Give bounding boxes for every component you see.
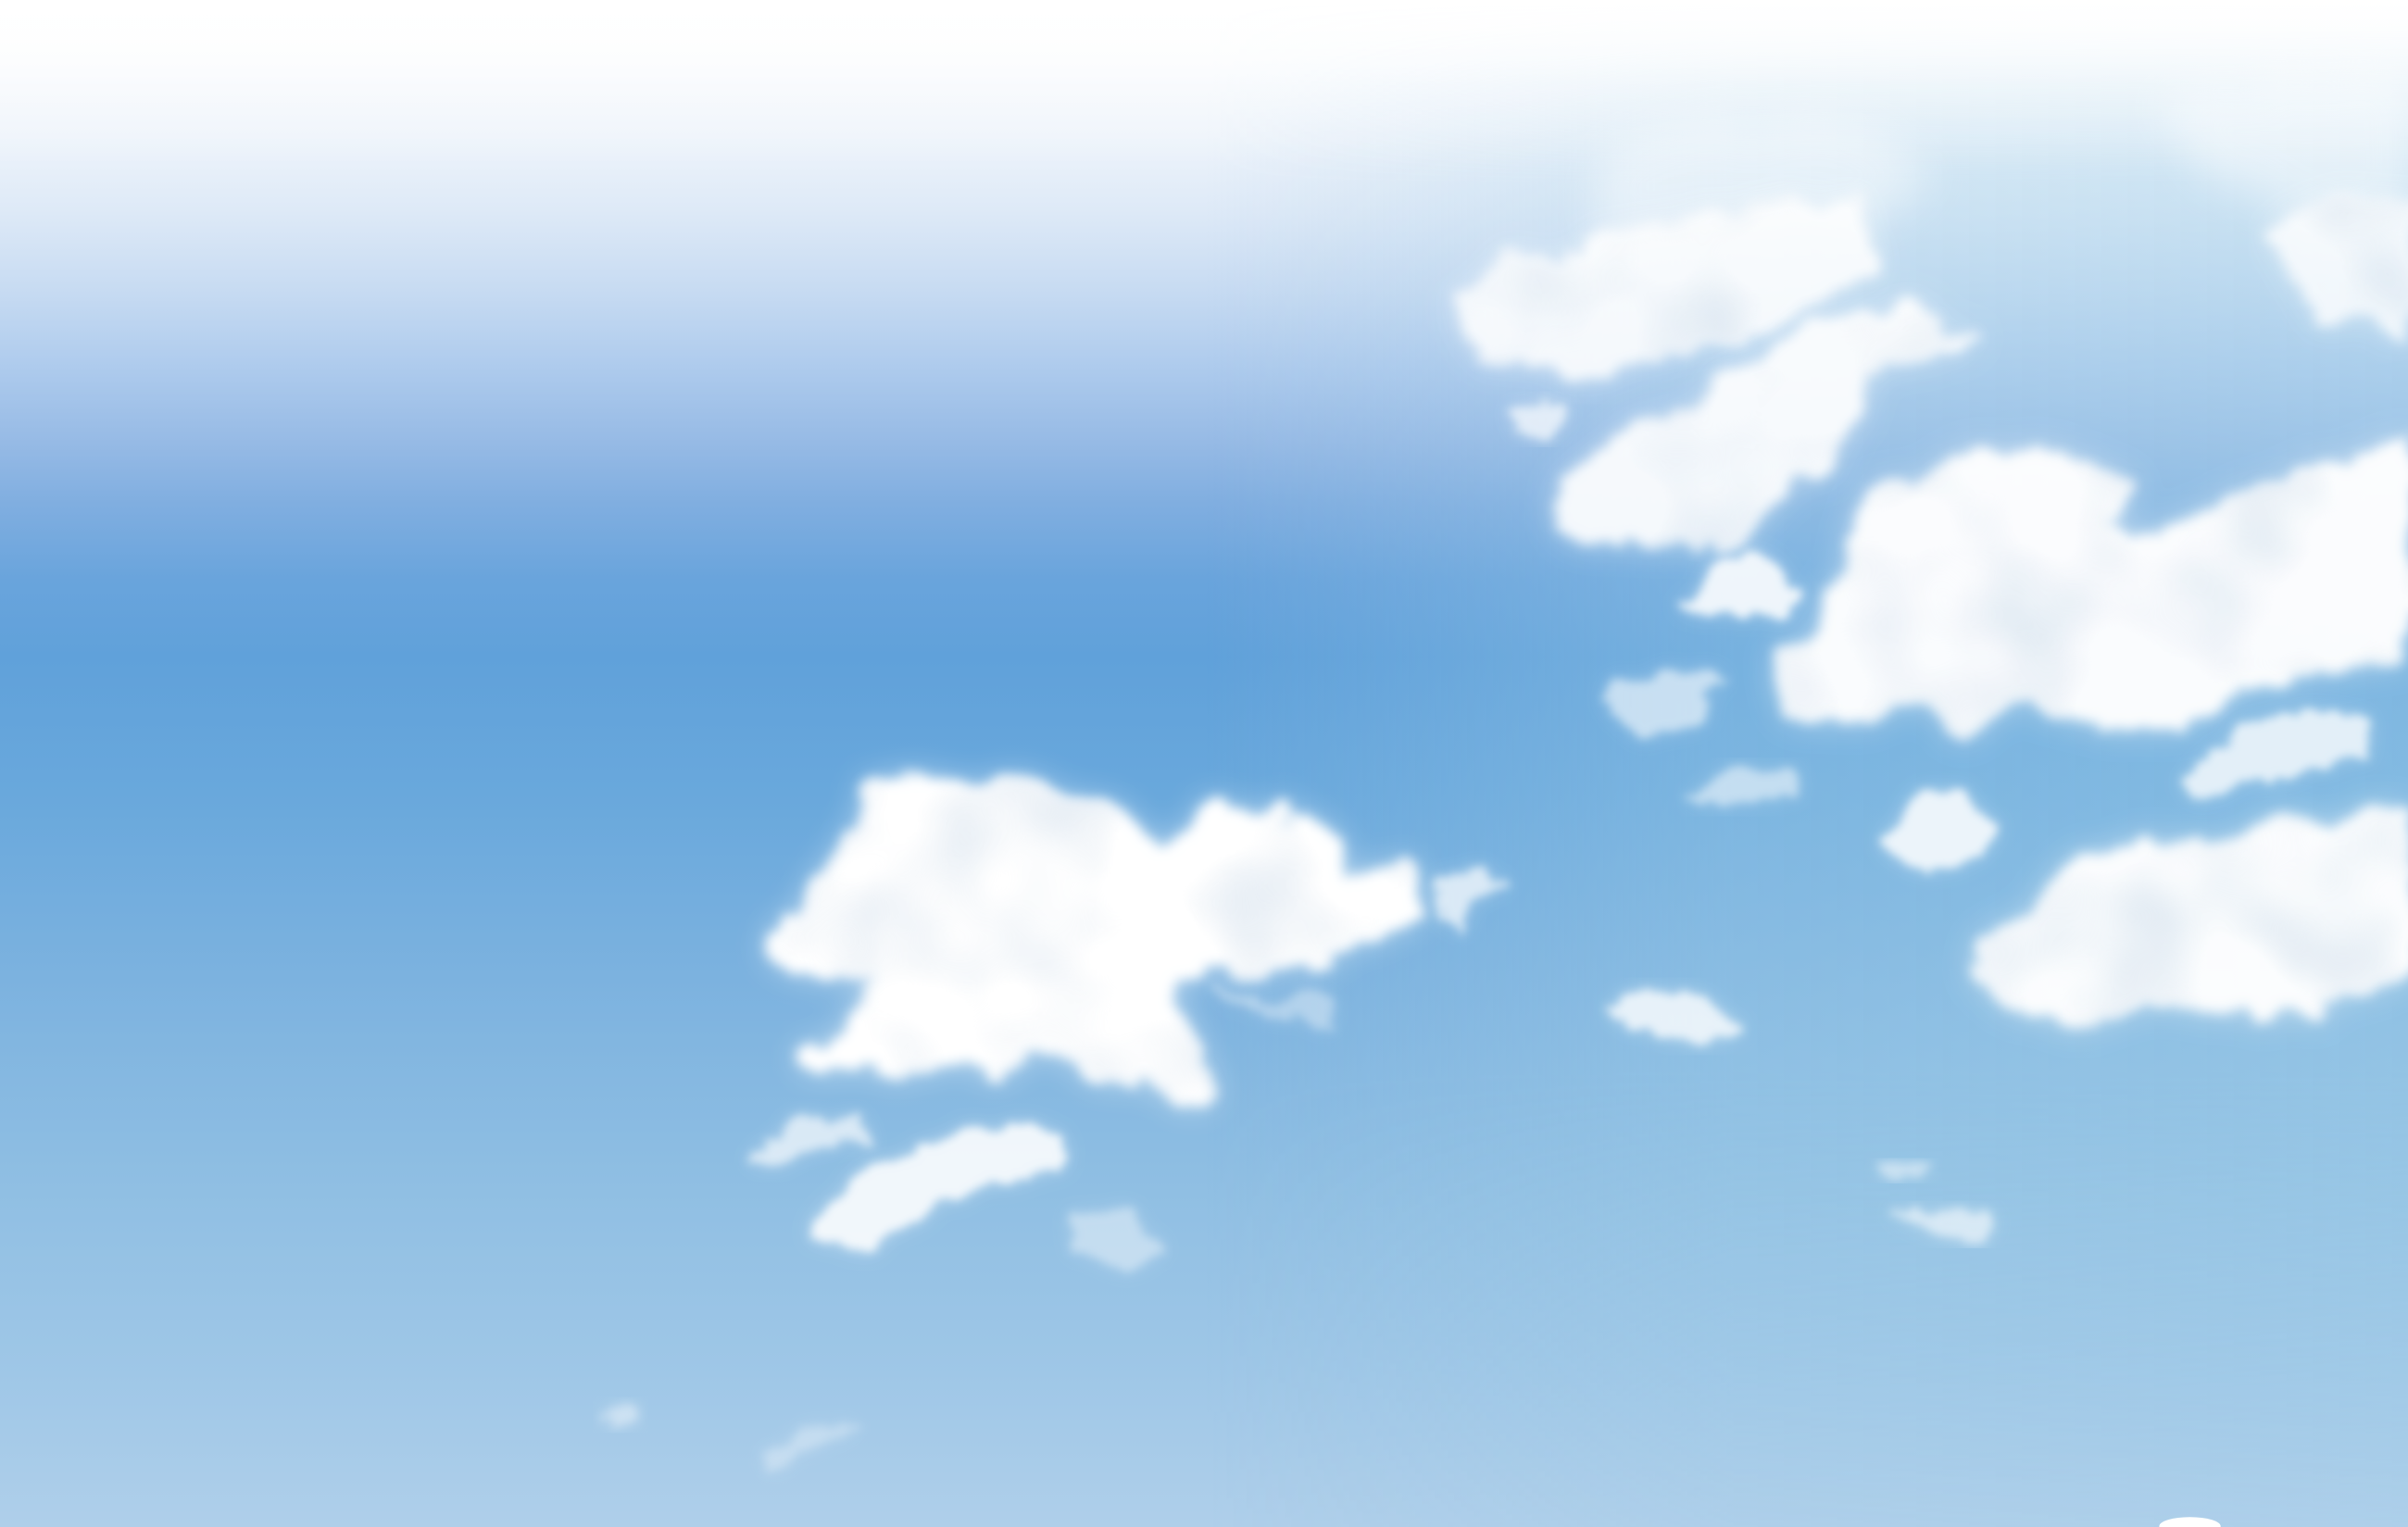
cloud: puff right of main cloud (1440, 872, 1505, 933)
top white fade over clouds (0, 0, 2408, 169)
cloud haze: upper right (1597, 61, 2408, 245)
cloud: lower right large cloud (1975, 820, 2408, 1020)
cloud: right small puff (2186, 714, 2370, 797)
cloud: small puff under large cloud (1883, 789, 2000, 869)
cloud: corner top right (2280, 200, 2408, 330)
cloud: bottom tiny puff (605, 1405, 635, 1425)
cloud: small puff below centre right (1682, 553, 1794, 619)
cloud: wisp beneath large cloud (1682, 770, 1797, 803)
cloud: top right group (1459, 196, 1862, 362)
cloud: wisp left of large cloud (1603, 672, 1723, 737)
cloud: lower puff (1072, 1207, 1164, 1267)
cloud: small wisp lower right 2 (1889, 1211, 1990, 1237)
cloud: bottom edge sliver (2159, 1517, 2221, 1527)
cloud: lower left wisp (749, 1118, 871, 1164)
cloud: mid small wisp (1603, 995, 1743, 1038)
cloud: lower central cloud (814, 1125, 1062, 1245)
cloud: small puff left of centre right (1508, 404, 1566, 434)
lighter sky tint on the right (1389, 66, 2408, 1211)
cloud: small wisp lower right (1880, 1164, 1929, 1178)
cloud: wisp beneath main cloud right (1210, 990, 1336, 1032)
cloud: main central cloud (777, 772, 1413, 1092)
cloud: bottom wisp streak (759, 1423, 865, 1471)
cloud: large right cloud (1769, 438, 2408, 728)
cloud: centre right vertical (1557, 313, 1965, 550)
